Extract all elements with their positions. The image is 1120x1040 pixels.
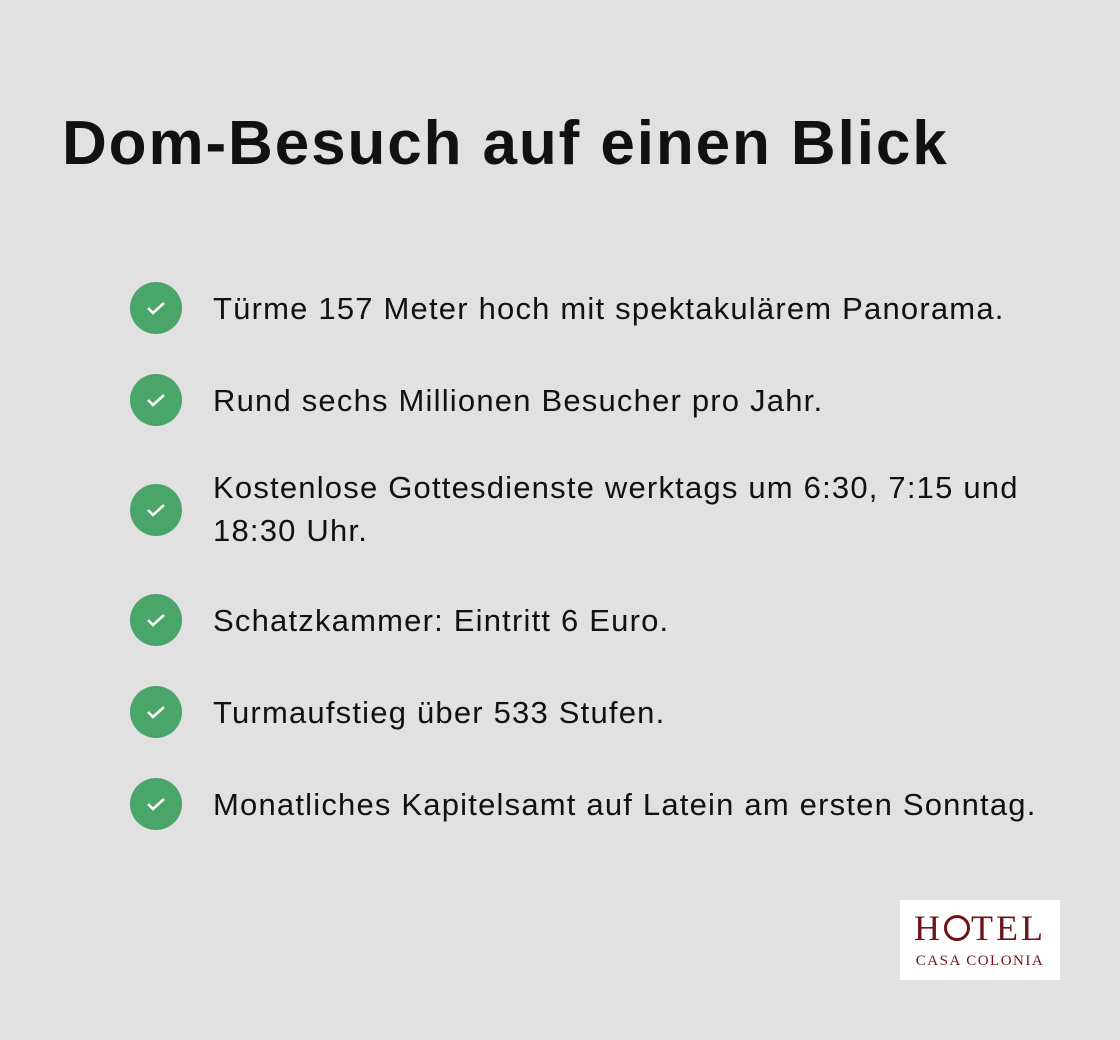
item 3: 18:30 Uhr. bbox=[213, 513, 368, 548]
logo: H TEL bbox=[914, 908, 1046, 948]
logo bbox=[900, 900, 1060, 980]
item 4: Schatzkammer: Eintritt 6 Euro. bbox=[213, 603, 669, 638]
item 1: Türme 157 Meter hoch mit spektakulärem Panorama. bbox=[213, 291, 1005, 326]
item 2 bbox=[130, 374, 823, 426]
item 3 bbox=[130, 470, 1019, 548]
item 6: Monatliches Kapitelsamt auf Latein am ersten Sonntag. bbox=[213, 787, 1037, 822]
item 3: Kostenlose Gottesdienste werktags um 6:30, 7:15 und bbox=[213, 470, 1019, 505]
item 1 bbox=[130, 282, 1005, 334]
item 6 bbox=[130, 778, 1037, 830]
item 4 bbox=[130, 594, 669, 646]
item 2: Rund sechs Millionen Besucher pro Jahr. bbox=[213, 383, 823, 418]
logo: CASA COLONIA bbox=[916, 953, 1044, 969]
item 5 bbox=[130, 686, 665, 738]
item 5: Turmaufstieg über 533 Stufen. bbox=[213, 695, 665, 730]
title: Dom-Besuch auf einen Blick bbox=[62, 109, 949, 178]
